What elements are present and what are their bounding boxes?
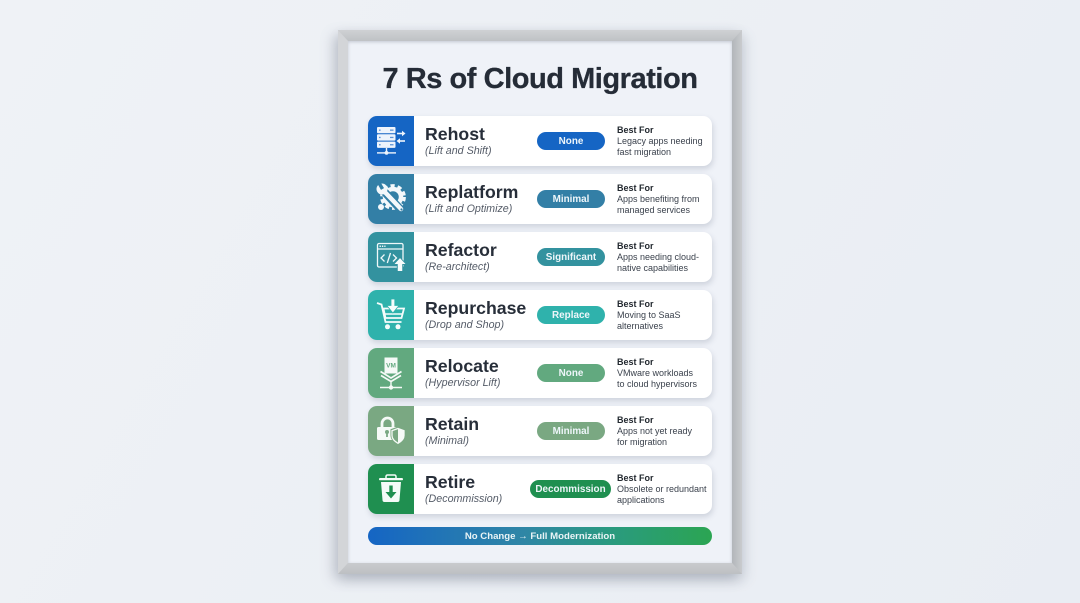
icon: trash can: [368, 464, 414, 514]
pill: Minimal: [537, 422, 605, 440]
best for text: VMware workloads: [617, 368, 693, 378]
best for text: Best For: [617, 357, 654, 367]
name: Repurchase: Repurchase: [425, 298, 526, 318]
name: Relocate: Relocate: [425, 356, 499, 376]
frame bottom edge: [338, 563, 742, 574]
best for text: [617, 473, 707, 505]
row: Refactor: [368, 232, 712, 282]
best for text: Best For: [617, 241, 654, 251]
best for text: Apps benefiting from: [617, 194, 700, 204]
best for text: Best For: [617, 473, 654, 483]
best for text: [617, 299, 681, 331]
subtitle: (Hypervisor Lift): [425, 377, 500, 389]
subtitle: (Drop and Shop): [425, 319, 504, 331]
icon: shopping cart: [368, 290, 414, 340]
pill: Minimal: Minimal: [553, 194, 589, 205]
spectrum bar: No Change to Full Modernization: [368, 527, 712, 545]
best for text: [617, 125, 703, 157]
best for text: Moving to SaaS: [617, 310, 681, 320]
row: Replatform: [368, 174, 712, 224]
frame right edge: [732, 37, 736, 567]
pill: Replace: [537, 306, 605, 324]
frame left edge: [338, 30, 348, 574]
best for text: Best For: [617, 415, 654, 425]
subtitle: (Re-architect): [425, 261, 490, 273]
poster panel: [348, 41, 732, 563]
best for text: [617, 415, 692, 447]
subtitle: (Lift and Shift): [425, 145, 492, 157]
best for text: Best For: [617, 183, 654, 193]
pill: Decommission: Decommission: [535, 484, 606, 495]
best for text: native capabilities: [617, 263, 688, 273]
pill: None: [537, 132, 605, 150]
icon: VM on hypervisor: VM: [386, 362, 396, 370]
best for text: managed services: [617, 205, 690, 215]
name: Retain: Retain: [425, 414, 479, 434]
icon: gear and wrench: [368, 174, 414, 224]
row: Retain: [368, 406, 712, 456]
pill: Replace: Replace: [552, 310, 590, 321]
subtitle: (Lift and Optimize): [425, 203, 512, 215]
best for text: [617, 357, 697, 389]
best for text: Legacy apps needing: [617, 136, 703, 146]
subtitle: (Decommission): [425, 493, 502, 505]
best for text: for migration: [617, 437, 667, 447]
name: Refactor: Refactor: [425, 240, 497, 260]
best for text: applications: [617, 495, 665, 505]
row: Rehost: [368, 116, 712, 166]
poster frame: [338, 30, 742, 574]
pill: Minimal: [537, 190, 605, 208]
name: Replatform: Replatform: [425, 182, 518, 202]
pill: Significant: Significant: [546, 252, 596, 263]
frame top edge: [338, 30, 742, 32]
best for text: fast migration: [617, 147, 671, 157]
name: Retire: Retire: [425, 472, 475, 492]
best for text: Apps not yet ready: [617, 426, 692, 436]
pill: None: [537, 364, 605, 382]
pill: None: None: [559, 368, 583, 379]
best for text: alternatives: [617, 321, 663, 331]
best for text: Apps needing cloud-: [617, 252, 699, 262]
name: Rehost: Rehost: [425, 124, 485, 144]
title: 7 Rs of Cloud Migration: [382, 63, 698, 95]
best for text: [617, 183, 700, 215]
spectrum bar: No Change to Full Modernization: No Change → Full Modernization: [465, 531, 615, 542]
row: Relocate: [368, 348, 712, 398]
row: Repurchase: [368, 290, 712, 340]
pill: Significant: [537, 248, 605, 266]
pill: Minimal: Minimal: [553, 426, 589, 437]
best for text: to cloud hypervisors: [617, 379, 697, 389]
icon: code window with arrow: [368, 232, 414, 282]
icon: VM on hypervisor: [368, 348, 414, 398]
subtitle: (Minimal): [425, 435, 469, 447]
best for text: [617, 241, 699, 273]
best for text: Best For: [617, 299, 654, 309]
icon: server with arrows: [368, 116, 414, 166]
best for text: Best For: [617, 125, 654, 135]
icon: padlock and shield: [368, 406, 414, 456]
pill: Decommission: [530, 480, 611, 498]
pill: None: None: [559, 136, 583, 147]
row: Retire: [368, 464, 712, 514]
best for text: Obsolete or redundant: [617, 484, 707, 494]
